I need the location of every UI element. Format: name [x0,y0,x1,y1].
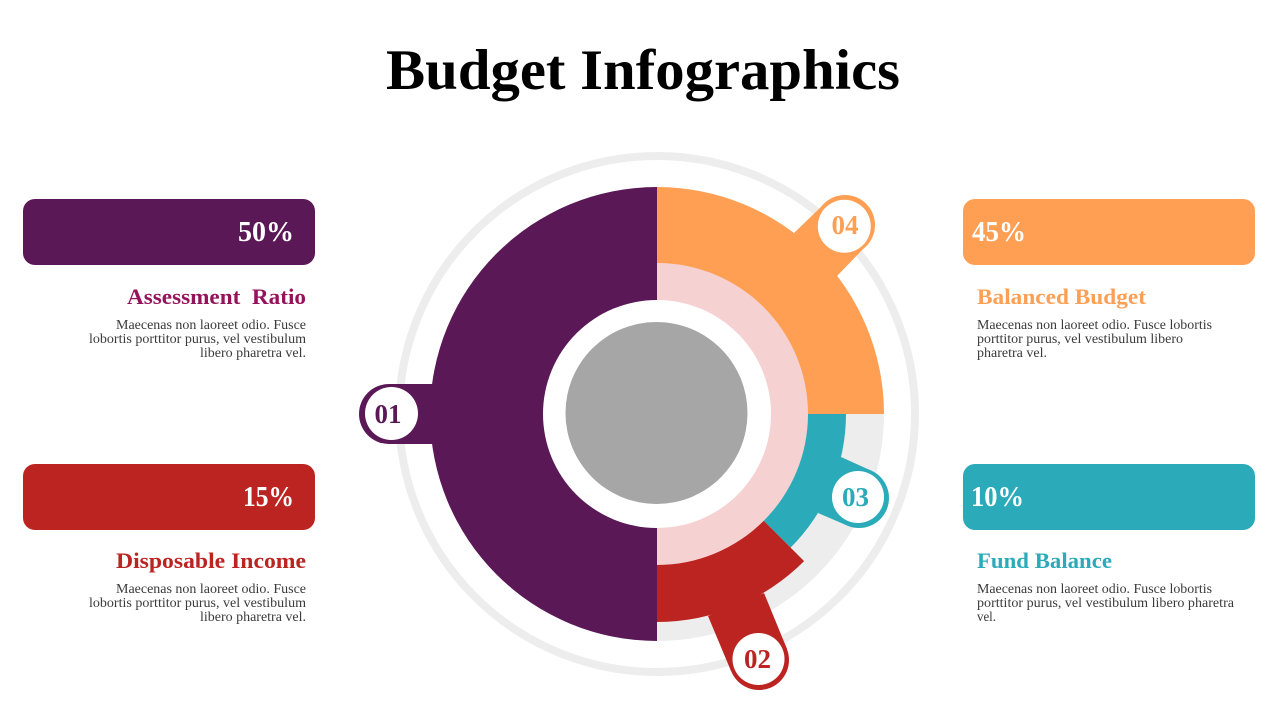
value bar: 45%: 45% [972,216,1026,248]
text block: fund balance [977,581,1234,624]
value bar: 15%: 15% [243,481,294,513]
outer ring [399,156,915,672]
text block: disposable income: libero pharetra vel. [200,609,306,624]
segment 02: red wedge [657,414,804,622]
radial chart [359,156,915,690]
panel: fund balance [963,464,1255,624]
text block: assessment ratio [89,317,307,360]
marker 04 [794,195,875,276]
text block: balanced budget: Maecenas non laoreet odio. Fusce lobortis [977,317,1212,332]
heading: assessment ratio: Assessment Ratio [127,284,306,309]
panel: assessment ratio [23,199,315,360]
value bar: 10%: 10% [971,481,1024,513]
marker 02 [708,593,789,690]
text block: disposable income: Maecenas non laoreet odio. Fusce [116,581,306,596]
text block: disposable income: lobortis porttitor purus, vel vestibulum [89,595,307,610]
marker 03 [818,457,889,528]
center gray circle [566,322,748,504]
segment 03: teal wedge [657,414,846,548]
value bar: 50%: 50% [238,216,294,248]
text block: balanced budget: porttitor purus, vel vestibulum libero [977,331,1183,346]
marker 01: 01 [374,399,402,429]
panel: balanced budget [963,199,1255,360]
text block: fund balance: Maecenas non laoreet odio. Fusce lobortis [977,581,1212,596]
inner pink band [657,263,808,565]
text block: assessment ratio: Maecenas non laoreet odio. Fusce [116,317,306,332]
heading: fund balance: Fund Balance [977,548,1112,573]
marker 04: 04 [832,210,858,240]
value bar: 45% [963,199,1255,265]
inner white ring [543,300,771,528]
heading: disposable income: Disposable Income [116,548,306,573]
text block: balanced budget [977,317,1212,360]
segment 01: purple half [430,187,657,641]
text block: fund balance: porttitor purus, vel vestibulum libero pharetra [977,595,1234,610]
title: Budget Infographics [386,39,900,102]
text block: balanced budget: pharetra vel. [977,345,1047,360]
marker 01 [359,384,440,444]
heading: balanced budget: Balanced Budget [977,284,1147,309]
value bar: 15% [23,464,315,530]
value bar: 50% [23,199,315,265]
marker 02: 02 [744,644,771,674]
segment 04: orange quadrant [657,187,884,414]
text block: assessment ratio: libero pharetra vel. [200,345,306,360]
text block: disposable income [89,581,307,624]
text block: assessment ratio: lobortis porttitor purus, vel vestibulum [89,331,307,346]
text block: fund balance: vel. [977,609,996,624]
marker 03: 03 [842,482,869,512]
panel: disposable income [23,464,315,624]
track: lower right quadrant [657,414,884,641]
value bar: 10% [963,464,1255,530]
